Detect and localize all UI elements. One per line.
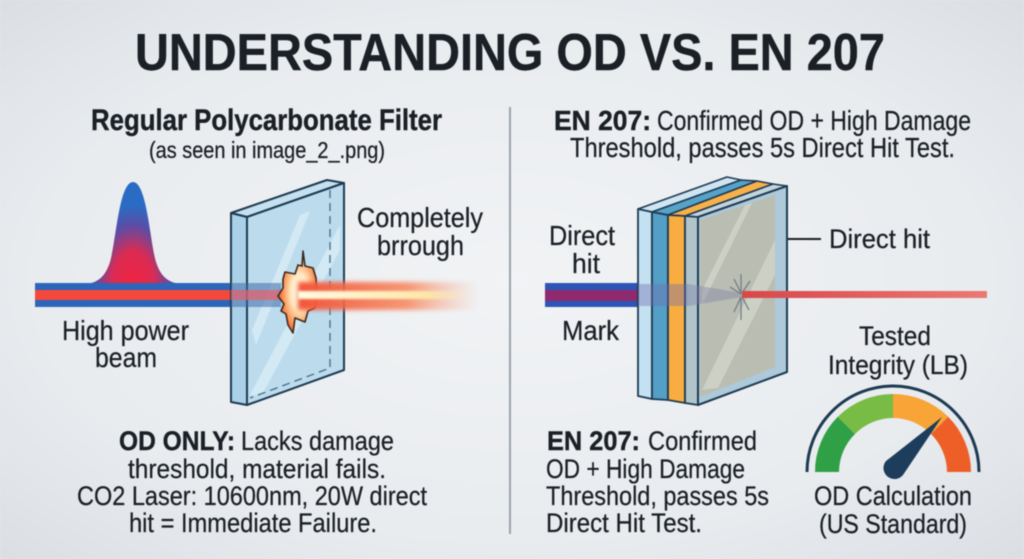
text: EN 207 conclusion: EN 207: [547, 426, 640, 456]
label: direct hit left [549, 220, 615, 279]
burn hole [278, 251, 317, 333]
panel: EN 207 filter [545, 105, 987, 539]
label: completely through: brrough [377, 230, 464, 261]
text: OD only conclusion: threshold, material fails. [128, 454, 386, 484]
text: EN 207 conclusion [546, 426, 769, 538]
incoming beam [545, 283, 640, 307]
label: completely through: Completely [357, 202, 483, 233]
multi-layer EN 207 filter [638, 177, 787, 405]
text: OD only conclusion: CO2 Laser: 10600nm, 20W direct [77, 481, 427, 511]
label: high power beam: beam [95, 342, 157, 373]
leader line: direct hit [788, 238, 821, 240]
panel: regular polycarbonate filter [35, 104, 483, 538]
text: EN 207 conclusion: Threshold, passes 5s [546, 481, 769, 511]
label: direct hit right: Direct hit [829, 224, 930, 254]
text: EN 207 conclusion: OD + High Damage [546, 454, 745, 484]
left heading [91, 104, 442, 163]
label: tested integrity: Tested [859, 321, 931, 351]
right heading [554, 105, 971, 163]
polycarbonate filter pane with burn-through [231, 180, 344, 405]
transmitted beam [298, 282, 480, 310]
label: direct hit left: Direct [549, 220, 615, 251]
text: OD only conclusion: Lacks damage [241, 426, 394, 456]
attenuated outgoing beam [742, 291, 987, 298]
impact mark [730, 274, 750, 320]
label: OD calculation: (US Standard) [819, 509, 967, 539]
label: OD calculation: OD Calculation [814, 481, 972, 511]
label: high power beam [62, 315, 189, 373]
label: mark: Mark [562, 315, 620, 346]
title: UNDERSTANDING OD VS. EN 207 [135, 24, 885, 82]
text: OD only conclusion [77, 426, 427, 538]
text: EN 207 conclusion: Confirmed [648, 426, 757, 456]
left heading: Regular Polycarbonate Filter [91, 104, 442, 137]
right heading: Threshold, passes 5s Direct Hit Test. [570, 132, 955, 163]
high power beam with gaussian peak [35, 182, 232, 307]
beam through filter [638, 284, 688, 306]
text: EN 207 conclusion: Direct Hit Test. [546, 508, 702, 538]
label: completely through [357, 202, 483, 261]
gauge needle [883, 417, 942, 479]
right heading: EN 207: [554, 105, 651, 136]
gauge [807, 386, 979, 479]
label: high power beam: High power [62, 315, 189, 346]
left heading: (as seen in image_2_.png) [149, 137, 385, 163]
text: OD only conclusion: OD ONLY: [119, 426, 235, 456]
divider between panels [509, 107, 511, 534]
label: tested integrity [828, 321, 968, 380]
text: OD only conclusion: hit = Immediate Failure. [129, 508, 377, 538]
label: OD calculation [814, 481, 972, 539]
label: direct hit left: hit [572, 248, 600, 279]
label: tested integrity: Integrity (LB) [828, 350, 968, 380]
